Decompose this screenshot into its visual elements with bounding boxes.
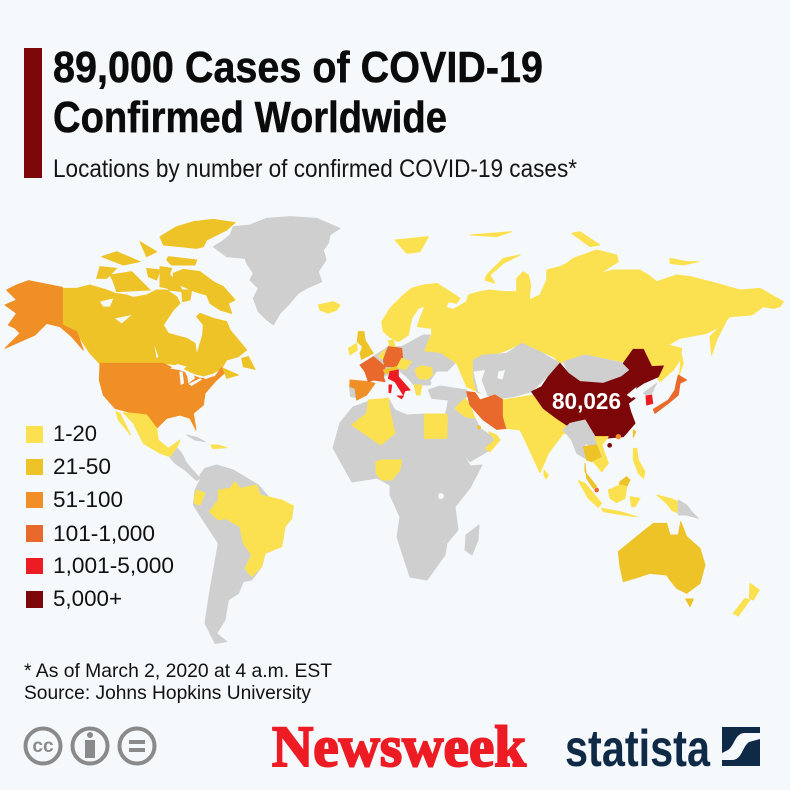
Mongolia (563, 355, 630, 383)
footnote and source: Source: Johns Hopkins University (24, 682, 311, 704)
Central America (169, 448, 200, 481)
Canadian lakes (100, 298, 158, 358)
Egypt (424, 414, 447, 438)
Tasmania (686, 599, 693, 607)
Turkey (428, 386, 468, 410)
logo: Newsweek: Newsweek (272, 714, 527, 779)
Cuba (187, 435, 205, 442)
Nigeria (376, 460, 402, 480)
Netherlands and Belgium (378, 349, 385, 359)
footnote and source: * As of March 2, 2020 at 4 a.m. EST (24, 660, 332, 682)
legend item 1-20 (26, 421, 97, 446)
Thailand and Malaysia (583, 445, 630, 488)
Eurasia north (382, 232, 783, 393)
legend item 5,000+: 5,000+ (53, 586, 122, 611)
Hainan (607, 443, 612, 448)
Papua New Guinea (678, 500, 698, 518)
Portugal (349, 385, 356, 397)
Australia (618, 522, 705, 593)
Algeria (352, 398, 395, 445)
Asia-Pacific (544, 420, 759, 616)
South Asia (503, 395, 585, 473)
Japan (653, 375, 687, 413)
Arabia (443, 408, 500, 462)
Vietnam, Indonesia, Philippines, Sri Lanka, New Zealand (544, 437, 759, 616)
title: 89,000 Cases of COVID-19 (53, 43, 543, 92)
Great Lakes (170, 364, 212, 386)
title (53, 43, 543, 142)
South Korea (646, 395, 653, 405)
legend item 1-20: 1-20 (53, 421, 97, 446)
China (532, 349, 663, 438)
USA, Mexico, Caribbean (99, 363, 227, 481)
Hong Kong and Macau (616, 434, 621, 439)
Austria (397, 358, 412, 370)
Madagascar (465, 525, 479, 555)
Switzerland (383, 367, 398, 373)
Qatar (477, 425, 481, 429)
Taiwan (633, 430, 636, 437)
legend (26, 421, 174, 611)
Iraq (455, 398, 475, 418)
Canada (62, 219, 255, 378)
South America (193, 465, 293, 643)
France (360, 357, 385, 382)
Alaska (5, 281, 83, 350)
North America (5, 217, 340, 378)
Iceland (318, 302, 340, 313)
legend item 101-1,000: 101-1,000 (53, 521, 155, 546)
Romania (415, 366, 433, 379)
Black Sea (430, 372, 460, 385)
Bohai Sea (627, 387, 640, 398)
title bar accent (24, 48, 42, 178)
Iran (467, 392, 507, 429)
Continental Europe base (368, 335, 455, 395)
legend item 21-50 (26, 454, 111, 479)
Ireland (348, 343, 357, 355)
USA (99, 363, 224, 430)
Germany (383, 347, 403, 367)
continent (193, 465, 293, 643)
logo: statista: statista (565, 720, 711, 778)
legend item 1,001-5,000: 1,001-5,000 (53, 553, 174, 578)
Spain (350, 380, 375, 400)
legend item 51-100: 51-100 (53, 487, 123, 512)
Greenland (213, 217, 340, 325)
UK (357, 332, 373, 359)
footnote and source (24, 660, 332, 704)
Lake Victoria (438, 493, 444, 499)
title: Confirmed Worldwide (53, 93, 447, 142)
Singapore (594, 488, 599, 492)
Dominican Republic (211, 445, 227, 449)
Greece (414, 385, 422, 395)
Arctic islands and Kamchatka (395, 232, 728, 375)
icon: creative commons licences (26, 728, 154, 764)
subtitle: Locations by number of confirmed COVID-19 cases* (53, 155, 577, 183)
North Korea (643, 383, 657, 395)
Ecuador (194, 490, 205, 505)
icon: creative commons licences: cc (32, 736, 54, 757)
Central Asia (473, 343, 560, 398)
Russia and Scandinavia (382, 250, 783, 393)
Africa (333, 398, 482, 580)
Europe and Middle East (348, 332, 560, 480)
East Asia (532, 349, 687, 438)
Southeast Asia mainland (563, 420, 603, 458)
Oman and UAE (485, 432, 500, 452)
Brazil (209, 482, 293, 577)
legend item 21-50: 21-50 (53, 454, 111, 479)
world map (5, 217, 783, 643)
Italy (388, 370, 410, 399)
Denmark (388, 340, 395, 347)
Caspian Sea (473, 370, 488, 398)
Mexico (116, 412, 180, 457)
Aral Sea (497, 370, 505, 379)
China case count: 80,026 (552, 388, 621, 414)
